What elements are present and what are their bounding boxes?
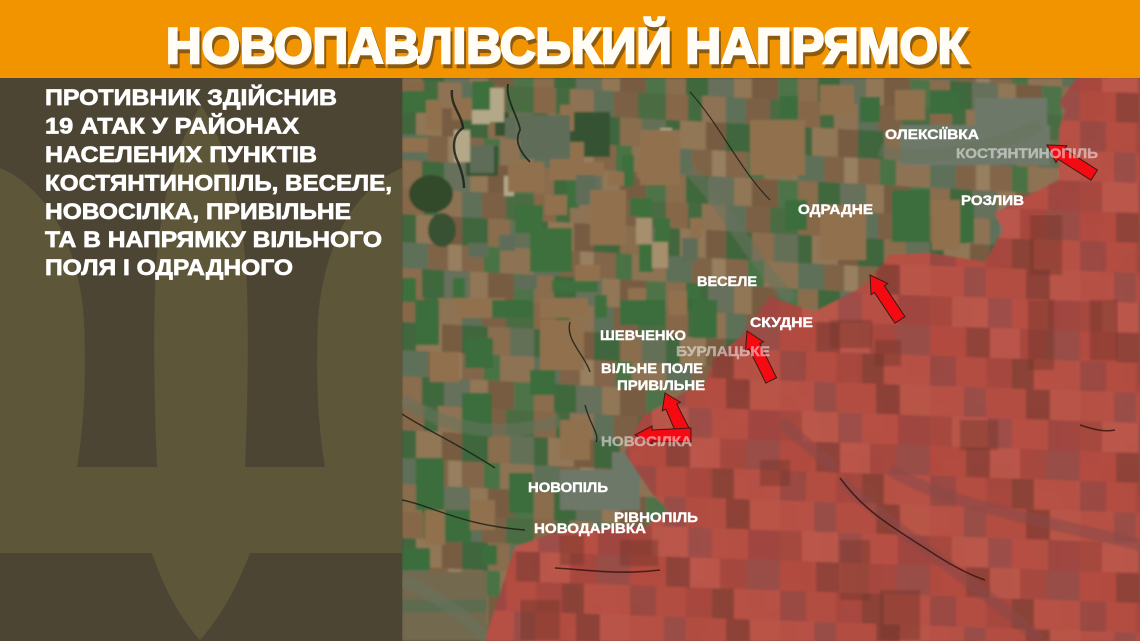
arrow: Skudne: [738, 327, 780, 385]
left panel background: [0, 78, 402, 641]
label: Skudne: СКУДНЕ: [750, 314, 813, 330]
label: Vilne Pole: ВІЛЬНЕ ПОЛЕ: [601, 360, 703, 376]
label: Odradne: ОДРАДНЕ: [798, 201, 873, 217]
label: Kostiantynopil: КОСТЯНТИНОПІЛЬ: [956, 145, 1098, 161]
label: Burlatske: БУРЛАЦЬКЕ: [676, 343, 770, 359]
label: Oleksiivka: ОЛЕКСІЇВКА: [885, 126, 979, 142]
label: Pryvilne: ПРИВІЛЬНЕ: [617, 377, 705, 393]
summary text block: НОВОСІЛКА, ПРИВІЛЬНЕ: [45, 199, 351, 224]
label: Novopil: НОВОПІЛЬ: [528, 479, 608, 495]
arrow: Vilne Pole: [656, 389, 692, 436]
label: Vesele: ВЕСЕЛЕ: [697, 273, 757, 289]
lower and central fields: [402, 90, 974, 570]
map: satellite view: [402, 78, 1140, 641]
map fields base: [402, 78, 1140, 641]
summary text block: 19 АТАК У РАЙОНАХ: [45, 114, 299, 138]
label: Novodarivka: НОВОДАРІВКА: [534, 520, 646, 536]
summary text block: НАСЕЛЕНИХ ПУНКТІВ: [45, 142, 317, 167]
summary text block: ПОЛЯ І ОДРАДНОГО: [45, 255, 293, 280]
label: Rozlyv: РОЗЛИВ: [961, 192, 1024, 208]
title: НОВОПАВЛІВСЬКИЙ НАПРЯМОК: [166, 17, 968, 74]
settlement labels: [528, 126, 1098, 536]
summary text block: ТА В НАПРЯМКУ ВІЛЬНОГО: [45, 227, 382, 252]
icon: trident emblem watermark: [0, 105, 402, 640]
arrow: Kostiantynopil: [1042, 137, 1100, 184]
arrows: [635, 137, 1100, 444]
label: Rivnopil: РІВНОПІЛЬ: [614, 509, 698, 525]
arrow: Novosilka: [635, 426, 691, 444]
title shadow: НОВОПАВЛІВСЬКИЙ НАПРЯМОК: [168, 21, 970, 78]
title banner: [0, 0, 1140, 78]
summary text block: ПРОТИВНИК ЗДІЙСНИВ: [45, 85, 337, 110]
label: Novosilka: НОВОСІЛКА: [601, 433, 692, 449]
occupied territory overlay: [485, 78, 1140, 641]
label: Shevchenko: ШЕВЧЕНКО: [600, 327, 686, 343]
summary text block: [45, 85, 392, 280]
summary text block: КОСТЯНТИНОПІЛЬ, ВЕСЕЛЕ,: [45, 170, 392, 196]
arrow: Odradne: [862, 269, 908, 325]
rivers: [402, 84, 770, 530]
